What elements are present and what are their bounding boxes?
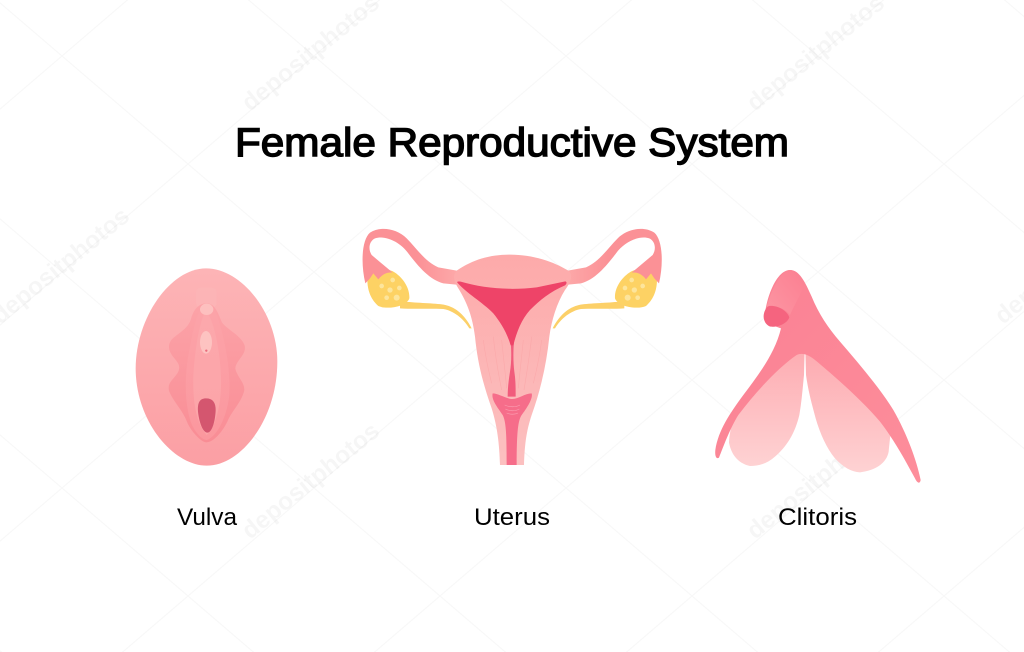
outer shape <box>136 268 277 466</box>
left tube, ovary and ligament <box>363 229 472 328</box>
hood <box>767 270 804 315</box>
uterus body <box>454 255 571 465</box>
mons highlight <box>196 288 217 308</box>
title: Female Reproductive System <box>235 121 789 165</box>
outer labia <box>169 303 245 442</box>
vestibule <box>193 312 221 435</box>
cervix folds <box>505 405 520 414</box>
glans <box>764 306 789 327</box>
vaginal opening <box>198 398 216 433</box>
clitoral hood <box>200 304 213 315</box>
label: clitoris: Clitoris <box>778 504 857 531</box>
figure: vulva <box>136 268 277 466</box>
watermark: depositphotos <box>237 417 385 545</box>
right tube, ovary and ligament <box>553 229 662 328</box>
label: uterus: Uterus <box>474 504 550 531</box>
right bulb <box>805 350 892 472</box>
urethral opening <box>200 331 212 354</box>
watermark: depositphotos <box>742 417 890 545</box>
left bulb <box>729 343 805 466</box>
label: vulva: Vulva <box>177 504 238 531</box>
figure: clitoris <box>715 270 921 483</box>
figure: uterus <box>363 229 662 465</box>
uterine cavity <box>457 281 567 345</box>
cervix and vagina <box>492 393 532 465</box>
inner labia <box>186 305 230 440</box>
uterine muscle lines <box>483 337 542 390</box>
uterine canal <box>508 342 516 397</box>
urethra dot <box>205 349 207 352</box>
body and crura <box>715 270 921 483</box>
